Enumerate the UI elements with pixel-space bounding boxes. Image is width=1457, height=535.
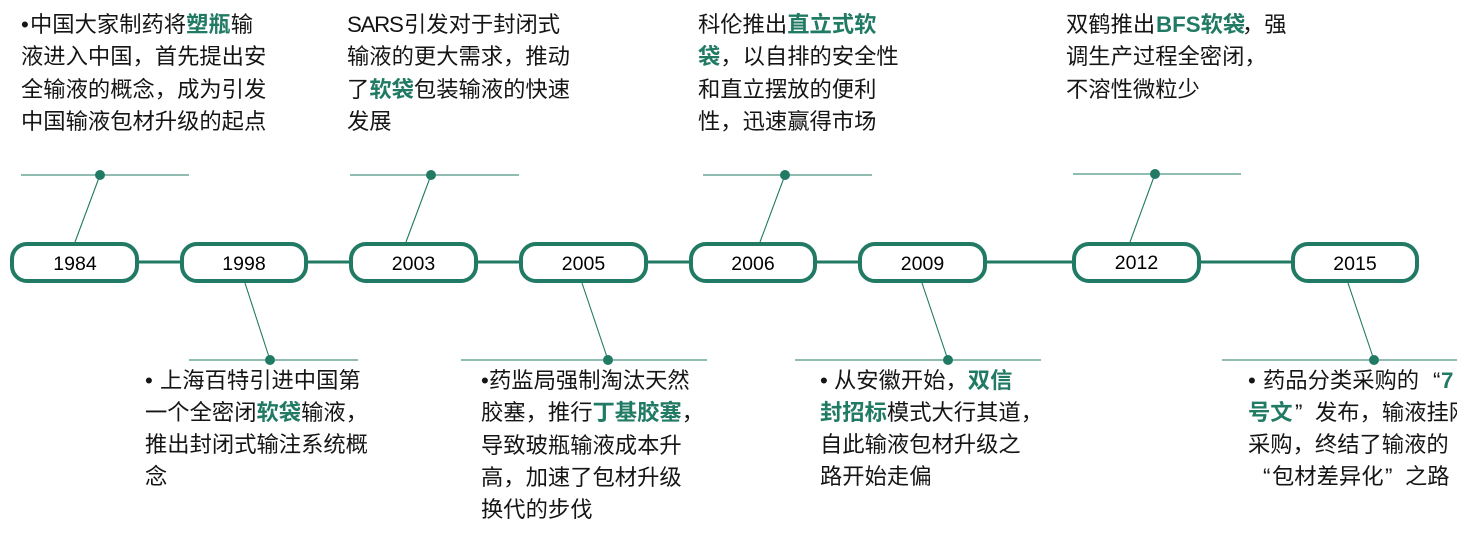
timeline axis bbox=[139, 260, 1291, 264]
text: 2015 description: ” bbox=[1385, 464, 1392, 489]
milestone 1998 bbox=[145, 244, 368, 489]
year pill bbox=[182, 244, 306, 281]
text: 2005 description: 高，加速了包材升级 bbox=[481, 465, 682, 490]
text: 2015 description: • bbox=[1248, 368, 1256, 393]
text: 2015 description: “ bbox=[1433, 368, 1440, 393]
text: 2003 description: 了 bbox=[347, 77, 369, 102]
text: 1998 description: 软袋输液， bbox=[256, 400, 368, 425]
text: 2009 description: 自此输液包材升级之 bbox=[820, 432, 1021, 457]
text: 1998 description: • bbox=[145, 368, 153, 393]
callout dot bbox=[603, 355, 613, 365]
text: 2005 description: • bbox=[481, 368, 489, 393]
milestone 2005 bbox=[461, 244, 707, 522]
text: 2006 description: 直立式软 bbox=[787, 11, 876, 37]
callout dot bbox=[780, 170, 790, 180]
year pill bbox=[12, 244, 137, 281]
text: 2012 description: 调生产过程全密闭， bbox=[1066, 44, 1267, 69]
text: 2015 description: 药品分类采购的 bbox=[1263, 368, 1419, 393]
text: 1998 description: 推出封闭式输注系统概 bbox=[145, 432, 368, 457]
text: 2006 description: 和直立摆放的便利 bbox=[698, 77, 876, 102]
text: 1984 description: 塑瓶输 bbox=[186, 12, 253, 37]
year: 1984 bbox=[53, 253, 97, 275]
callout line bbox=[21, 175, 189, 242]
year: 2012 bbox=[1115, 252, 1158, 274]
milestone 2006 bbox=[691, 11, 899, 281]
callout line bbox=[350, 175, 519, 242]
text: 1998 description: 一个全密闭 bbox=[145, 400, 256, 425]
callout line bbox=[189, 283, 358, 360]
text: 1984 description: 全输液的概念，成为引发 bbox=[21, 77, 266, 102]
milestone 2012 bbox=[1066, 12, 1287, 281]
text: 2015 description: “ bbox=[1263, 464, 1270, 489]
callout dot bbox=[943, 355, 953, 365]
text: 2012 description: ，强 bbox=[1242, 12, 1287, 37]
milestone 2003 bbox=[347, 12, 570, 281]
year: 2005 bbox=[562, 253, 605, 275]
year: 1998 bbox=[222, 253, 266, 275]
text: 1984 description: 液进入中国，首先提出安 bbox=[21, 44, 266, 69]
text: 2005 description: 导致玻瓶输液成本升 bbox=[481, 433, 682, 458]
text: 2005 description: 胶塞，推行 bbox=[481, 400, 592, 425]
year pill bbox=[351, 244, 476, 281]
text: 2015 description: 号文 bbox=[1248, 400, 1293, 425]
year pill bbox=[691, 244, 815, 281]
text: 2009 description: 双信 bbox=[968, 368, 1012, 393]
text: 2015 description: 采购，终结了输液的 bbox=[1248, 432, 1449, 457]
year pill bbox=[521, 244, 646, 281]
text: 2006 description: 科伦推出 bbox=[698, 12, 787, 37]
text: 2012 description: BFS软袋 bbox=[1156, 12, 1245, 37]
milestone 2009 bbox=[795, 244, 1043, 489]
text: 2003 description: 输液的更大需求，推动 bbox=[347, 44, 570, 69]
callout dot bbox=[426, 170, 436, 180]
text: 2005 description: 丁基胶塞， bbox=[592, 400, 704, 425]
text: 2015 description: 包材差异化 bbox=[1272, 464, 1384, 489]
text: 2012 description: 双鹤推出 bbox=[1066, 12, 1155, 37]
text: 2009 description: 模式大行其道， bbox=[887, 400, 1043, 425]
text: 1998 description: 上海百特引进中国第 bbox=[160, 368, 361, 393]
callout dot bbox=[265, 355, 275, 365]
text: 2009 description: • bbox=[820, 368, 828, 393]
callout dot bbox=[1369, 355, 1379, 365]
callout line bbox=[1222, 283, 1457, 360]
text: 1984 description: 中国大家制药将 bbox=[30, 12, 186, 37]
text: 1984 description: 中国输液包材升级的起点 bbox=[21, 109, 266, 134]
callout line bbox=[461, 283, 707, 360]
text: 2006 description: 袋 bbox=[698, 44, 720, 69]
text: 2005 description: 换代的步伐 bbox=[481, 497, 592, 522]
callout dot bbox=[1150, 169, 1160, 179]
callout line bbox=[1073, 174, 1241, 242]
text: 2003 description: 发展 bbox=[347, 109, 392, 134]
year: 2015 bbox=[1333, 253, 1377, 275]
text: 2003 description: SARS bbox=[347, 12, 403, 37]
text: 2003 description: 软袋包装输液的快速 bbox=[369, 77, 570, 102]
text: 2015 description: 7 bbox=[1441, 368, 1453, 393]
year: 2003 bbox=[392, 253, 435, 275]
text: 2015 description: ” bbox=[1295, 400, 1302, 425]
callout line bbox=[703, 175, 872, 242]
text: 2003 description: 引发对于封闭式 bbox=[404, 12, 560, 37]
year pill bbox=[860, 244, 985, 281]
year: 2009 bbox=[901, 253, 944, 275]
text: 2006 description: 性，迅速赢得市场 bbox=[698, 109, 876, 134]
text: 2009 description: 路开始走偏 bbox=[820, 464, 932, 489]
text: 2009 description: 封招标 bbox=[820, 400, 887, 425]
text: 2005 description: 药监局强制淘汰天然 bbox=[489, 368, 690, 393]
text: 1984 description: • bbox=[21, 12, 29, 37]
callout line bbox=[795, 283, 1041, 360]
year pill bbox=[1293, 244, 1417, 281]
text: 2009 description: 从安徽开始， bbox=[834, 368, 968, 393]
text: 2015 description: 之路 bbox=[1405, 464, 1450, 489]
text: 2012 description: 不溶性微粒少 bbox=[1066, 77, 1200, 102]
year pill bbox=[1074, 244, 1199, 281]
milestone 1984 bbox=[12, 12, 266, 281]
year: 2006 bbox=[731, 253, 775, 275]
text: 1998 description: 念 bbox=[145, 464, 167, 489]
callout dot bbox=[95, 170, 105, 180]
text: 2006 description: ，以自排的安全性 bbox=[720, 44, 899, 69]
milestone 2015 bbox=[1222, 244, 1457, 489]
